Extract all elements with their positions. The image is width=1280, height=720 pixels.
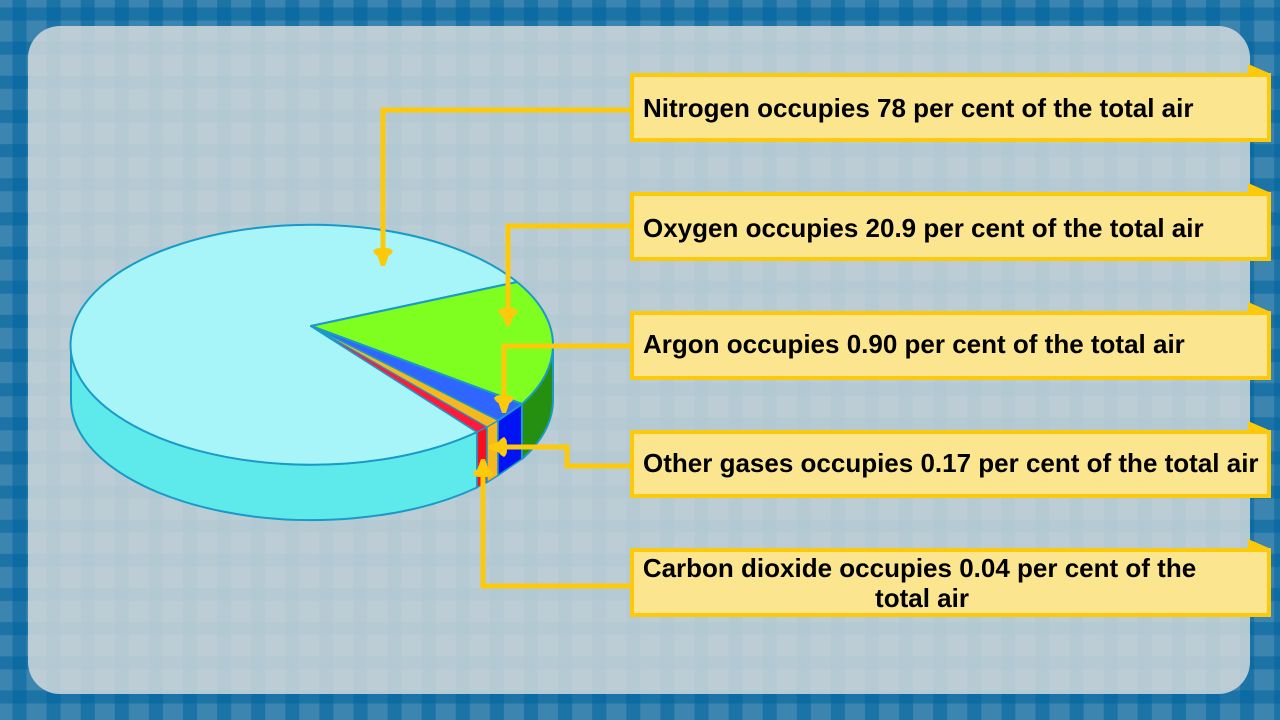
nitrogen side face — [71, 345, 477, 520]
label: carbon dioxide: total air — [875, 583, 969, 613]
label: nitrogen — [632, 64, 1271, 140]
label: oxygen — [632, 183, 1271, 259]
nitrogen top slice — [71, 225, 517, 465]
label: argon: Argon occupies 0.90 per cent of the total air — [643, 329, 1185, 359]
argon top slice — [311, 326, 522, 420]
arrow: other gases — [489, 437, 630, 466]
other gases side face — [487, 420, 498, 482]
arrow: argon — [494, 346, 630, 413]
argon side face — [498, 404, 522, 476]
arrow: oxygen — [498, 226, 630, 326]
label: nitrogen: Nitrogen occupies 78 per cent of the total air — [643, 93, 1193, 123]
label: carbon dioxide — [632, 539, 1271, 615]
label: argon — [632, 302, 1271, 378]
carbon dioxide side face — [477, 427, 487, 488]
label: other gases: Other gases occupies 0.17 per cent of the total air — [643, 448, 1259, 478]
other gases top slice — [311, 326, 498, 427]
label: oxygen: Oxygen occupies 20.9 per cent of the total air — [643, 213, 1204, 243]
label: carbon dioxide: Carbon dioxide occupies 0.04 per cent of the — [643, 553, 1196, 583]
label: other gases — [632, 421, 1271, 496]
arrow: nitrogen — [373, 110, 630, 266]
pie chart: atmosphere composition — [71, 225, 553, 520]
oxygen side face — [522, 345, 553, 459]
arrow: carbon dioxide — [473, 459, 630, 586]
carbon dioxide top slice — [311, 326, 487, 432]
oxygen top slice — [311, 282, 553, 404]
